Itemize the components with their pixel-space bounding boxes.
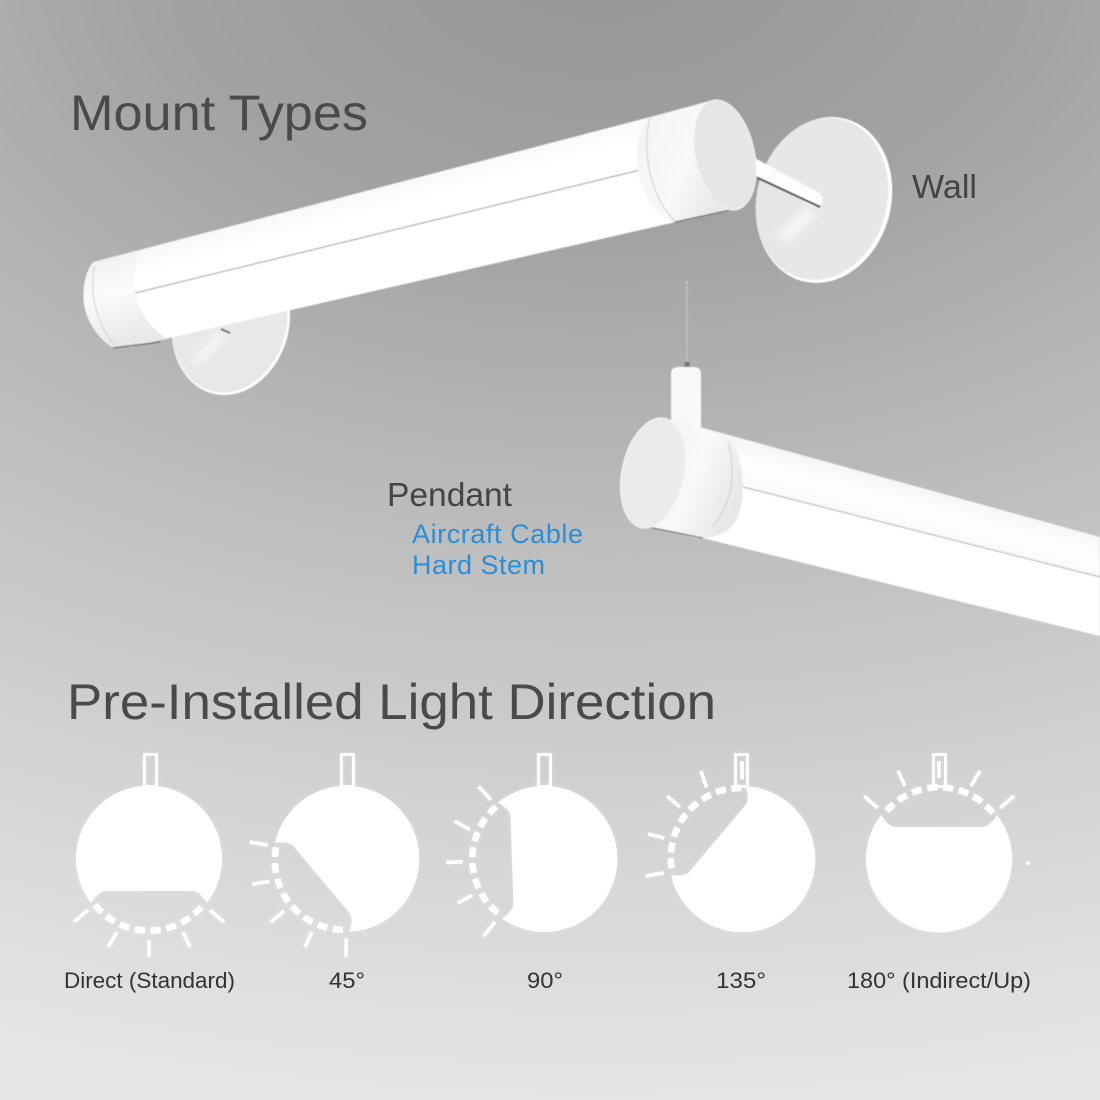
diagram: 135 degrees (619, 739, 846, 964)
diagram: Direct (Standard) (74, 754, 224, 957)
diagram: 45 degrees (223, 754, 450, 979)
option: Aircraft Cable: Aircraft Cable (412, 519, 583, 549)
wall mount fixture (83, 94, 910, 409)
pendant fixture (611, 280, 1100, 636)
aircraft cable (684, 280, 690, 367)
tube body (110, 104, 700, 347)
caption: 45 degrees: 45° (329, 968, 365, 993)
pendant light strip (700, 487, 1100, 636)
option: Hard Stem: Hard Stem (412, 550, 545, 580)
caption: Direct (Standard): Direct (Standard) (64, 968, 235, 993)
caption: 135 degrees: 135° (716, 968, 766, 993)
pendant end cap (611, 412, 743, 538)
pendant stem (671, 367, 701, 430)
wall arm (752, 165, 820, 207)
right end cap (637, 94, 765, 222)
lower wall disc (156, 237, 306, 409)
left end cap (83, 250, 167, 348)
label: Pendant: Pendant (387, 476, 512, 513)
diagram: 90 degrees (443, 754, 620, 937)
label: Wall: Wall (912, 168, 977, 205)
pendant tube body (680, 422, 1100, 636)
heading: Pre-Installed Light Direction: Pre-Installed Light Direction (67, 674, 716, 730)
upper wall disc (738, 102, 910, 298)
caption: 90 degrees: 90° (527, 968, 563, 993)
heading: Mount Types: Mount Types (70, 85, 368, 141)
light strip (130, 170, 680, 340)
caption: 180 degrees (Indirect/Up): 180° (Indirect/Up) (847, 968, 1031, 993)
diagram: 180 degrees (864, 754, 1030, 932)
